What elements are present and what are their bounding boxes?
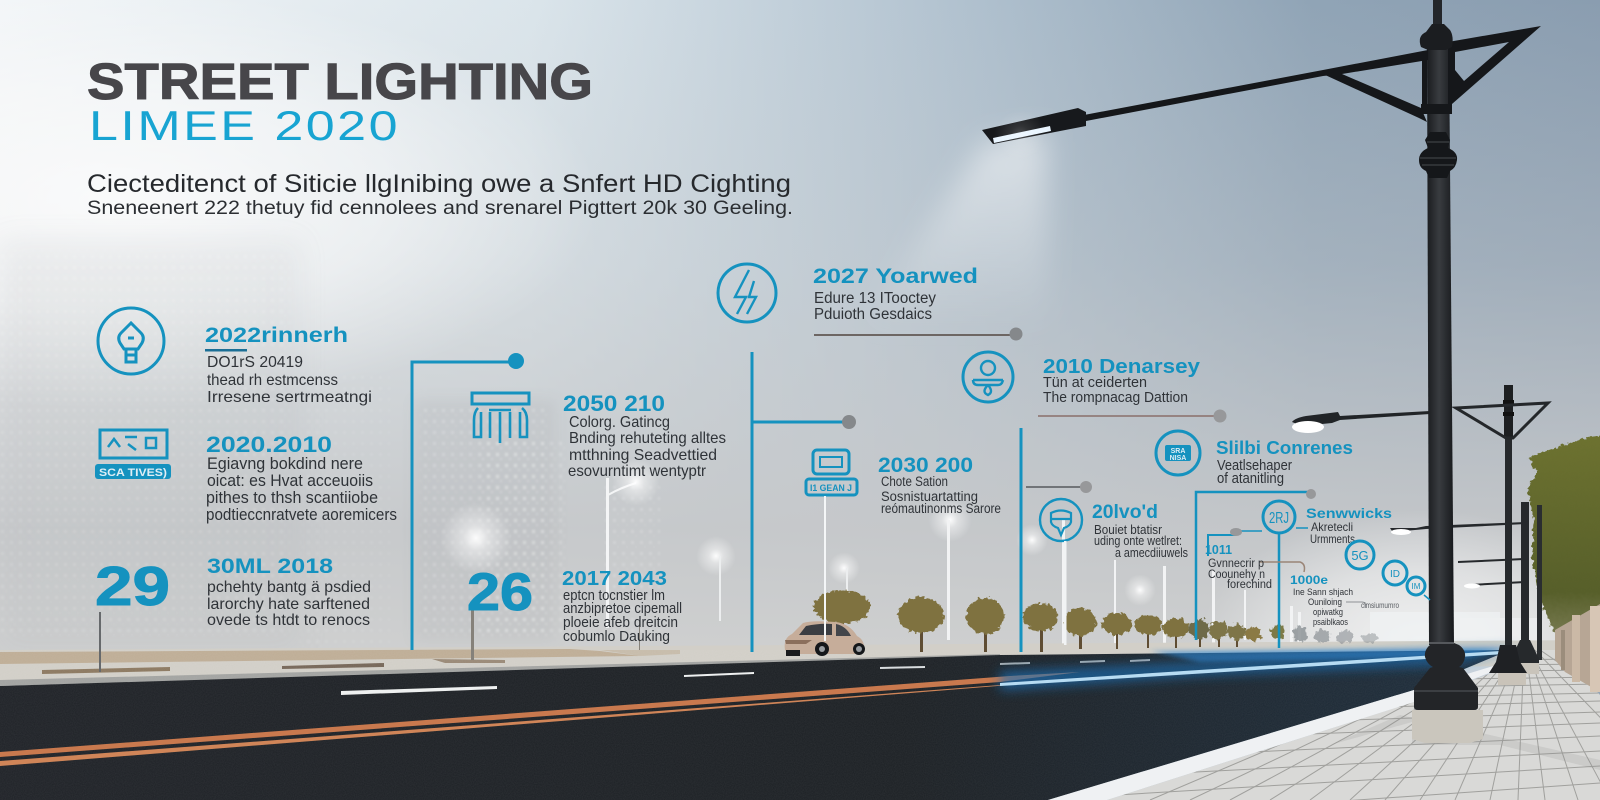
badge: 5G: 5G: [1351, 548, 1369, 563]
body: of atanitling: [1217, 471, 1284, 487]
icon: chip in circle: SRA: [1171, 448, 1185, 455]
body: esovurntimt wentyptr: [568, 463, 707, 480]
orange double centre line: [0, 672, 1080, 766]
body: oicat: es Hvat acceuoiis: [207, 472, 373, 490]
body: reómautinonms Sarore: [881, 501, 1001, 516]
body: opiwatkg: [1313, 607, 1343, 618]
item: 1011: [1205, 542, 1272, 591]
item: 1000e: clmsiumumro: [1361, 601, 1399, 610]
heading: Slilbi Conrenes: [1216, 438, 1353, 458]
far street lamps: [1390, 502, 1542, 674]
road markings: [341, 659, 1150, 695]
trees along road: [814, 590, 1378, 652]
body: [207, 354, 372, 406]
body: Coounehy n: [1208, 569, 1265, 581]
icon: chip in circle: [1156, 431, 1200, 475]
second street lamp: [1292, 385, 1548, 685]
icon: bulb in circle: [98, 308, 164, 374]
body: [1094, 522, 1188, 560]
item: 2017 2043: [467, 563, 682, 645]
body: pithes to thsh scantiiobe: [206, 489, 378, 507]
badge: IM: IM: [1412, 582, 1421, 591]
title line 2: LIMEE 2020: [89, 102, 400, 149]
body: podtieccnratvete aoremicers: [206, 506, 397, 524]
body: Akretecli: [1311, 520, 1353, 534]
body: [814, 290, 936, 323]
heading: 2010 Denarsey: [1043, 356, 1201, 378]
heading: 2050 210: [563, 391, 665, 416]
heading: 20lvo'd: [1092, 502, 1158, 523]
body: [1310, 520, 1355, 546]
icon: person symbol: [963, 352, 1013, 402]
sidewalk with paving: [1100, 650, 1600, 800]
item: Senwwicks: [1263, 501, 1392, 546]
body: Chote Sation: [881, 474, 948, 489]
heading: 2017 2043: [562, 568, 667, 590]
body: Ine Sann shjach: [1293, 587, 1353, 598]
body: thead rh estmcenss: [207, 372, 338, 389]
item: 2022rinnerh: [98, 308, 372, 406]
body: Colorg. Gatincg: [569, 414, 670, 431]
small badges on the right: [1346, 541, 1425, 595]
roadside tree: [1527, 434, 1600, 660]
icon: sign board: [95, 430, 171, 479]
item: 2030 200: [806, 450, 1001, 641]
body: larorchy hate sarftened: [207, 596, 370, 613]
body: [1043, 374, 1188, 406]
body: forechind: [1227, 579, 1272, 591]
body: [206, 455, 397, 524]
icon: sign board: I1 GEAN J: [810, 483, 852, 493]
body: [563, 588, 682, 645]
body: [1217, 458, 1292, 487]
body: Ouniloing: [1308, 597, 1342, 608]
title block: [87, 53, 793, 219]
body: Urmments: [1310, 532, 1355, 546]
lamp base: [1412, 642, 1483, 743]
body: psaiblkaos: [1313, 617, 1348, 628]
lamp head: [982, 108, 1086, 161]
badge: ID: ID: [1390, 569, 1400, 580]
subtitle: Ciecteditenct of Siticie llgInibing owe a Snfert HD Cighting: [87, 170, 791, 198]
ground: kerb and far pavement: [0, 640, 1600, 686]
body: Bouiet btatisr: [1094, 522, 1163, 537]
icon: chip in circle: NISA: [1170, 455, 1186, 462]
item: 2027 Yoarwed: [718, 264, 978, 323]
body: mtthning Seadvettied: [569, 447, 717, 464]
main street lamp: [982, 0, 1541, 743]
item: 2050 210: [472, 391, 726, 480]
item: 2010 Denarsey: [963, 352, 1201, 406]
body: a amecdiiuwels: [1115, 545, 1188, 560]
item: 1000e: [1290, 573, 1399, 628]
body: eptcn tocnstier lm: [563, 588, 665, 604]
light beam from main lamp: [860, 132, 1048, 330]
tall street sign posts: [99, 610, 640, 672]
body: Tün at ceiderten: [1043, 374, 1147, 391]
heading: 30ML 2018: [207, 555, 333, 578]
heading: 1011: [1205, 542, 1232, 557]
heading: 2030 200: [878, 454, 973, 477]
item: Slilbi Conrenes: [1156, 431, 1353, 487]
asphalt road: [0, 650, 1510, 800]
body: Irresene sertrmeatngi: [207, 389, 372, 406]
roadside fence: [1555, 604, 1600, 692]
body: [1293, 587, 1353, 628]
body: [568, 414, 726, 480]
body: [881, 474, 1001, 516]
body: Edure 13 ITooctey: [814, 290, 936, 307]
lamp arm and braces: [1084, 26, 1541, 122]
blue light trail: [1000, 648, 1520, 690]
body: Veatlsehaper: [1217, 458, 1292, 474]
body: anzbipretoe cipemall: [563, 601, 682, 617]
item: 2020.2010: [95, 430, 397, 524]
body: Egiavng bokdind nere: [207, 455, 363, 473]
heading: 1000e: [1290, 573, 1328, 587]
body: ovede ts htdt to renocs: [207, 612, 370, 629]
heading: 2027 Yoarwed: [813, 265, 978, 288]
item: 20lvo'd: [1040, 499, 1188, 645]
icon: lamp fixture: [472, 393, 529, 443]
body: Bnding rehuteting alltes: [569, 430, 726, 447]
body: pchehty bantg ä psdied: [207, 579, 371, 596]
item: 30ML 2018: [95, 555, 371, 629]
body: Pduioth Gesdaics: [814, 306, 932, 323]
timeline connector lines: [412, 328, 1430, 652]
heading: Senwwicks: [1306, 505, 1392, 521]
icon: lamp in circle: [1040, 499, 1082, 541]
car: [785, 621, 865, 656]
title line 1: STREET LIGHTING: [87, 53, 593, 110]
white curb: [1048, 664, 1507, 800]
heading: 2022rinnerh: [205, 324, 348, 347]
subtitle second line: Sneneenert 222 thetuy fid cennolees and srenarel Pigttert 20k 30 Geeling.: [87, 198, 793, 219]
body: [1208, 558, 1272, 591]
icon: 2RJ badge: 2RJ: [1269, 510, 1289, 527]
big number: 29: [95, 555, 170, 617]
body: uding onte wetlret:: [1094, 533, 1182, 548]
icon: sign board: SCA TIVES): [99, 467, 167, 479]
body: Sosnistuartatting: [881, 489, 978, 504]
body: cobumlo Dauking: [563, 629, 670, 645]
body: Gvnnecrir p: [1208, 558, 1264, 570]
icon: lightning bolt: [718, 264, 776, 322]
body: The rompnacag Dattion: [1043, 389, 1188, 406]
body: ploeie afeb dreitcin: [563, 615, 678, 631]
icon: sign board: [806, 450, 857, 641]
big number: 26: [467, 563, 533, 622]
heading: 2020.2010: [206, 432, 332, 457]
background city skyline: [0, 240, 660, 650]
distant street lights and glows: [440, 458, 1540, 648]
body: [207, 579, 371, 629]
body: DO1rS 20419: [207, 354, 303, 371]
